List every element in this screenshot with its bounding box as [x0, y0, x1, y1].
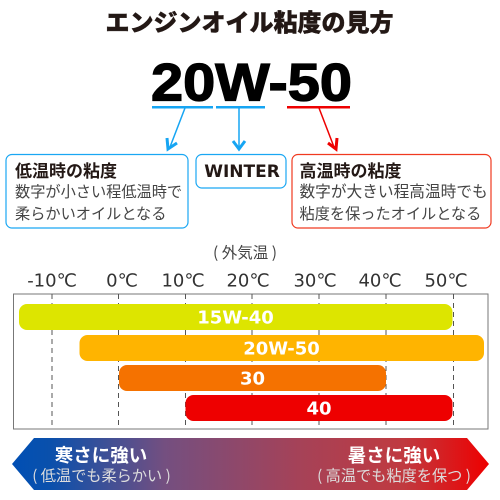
bar: 15W-40: [19, 304, 452, 330]
arrow: 20 to low temperature: [167, 108, 185, 149]
temperature axis labels: 0℃: [106, 270, 138, 292]
chart axis title: ( 外気温 ): [213, 241, 277, 263]
panel: low temperature viscosity: [6, 154, 188, 228]
underline: 50: [287, 106, 350, 108]
panel: high temperature viscosity: [292, 154, 491, 228]
temperature axis labels: 40℃: [358, 270, 402, 292]
heat resistance note: ( 高温でも粘度を保つ ): [317, 464, 471, 486]
panel: high temperature viscosity: 高温時の粘度: [300, 157, 402, 182]
cold resistance label: 寒さに強い: [55, 442, 147, 468]
panel: winter: WINTER: [204, 162, 280, 182]
arrow: W to winter: [233, 108, 245, 149]
bar: 40: 40: [306, 398, 332, 420]
underline: 20: [152, 106, 213, 108]
bar: 40: [186, 395, 452, 421]
temperature axis labels: 10℃: [161, 270, 205, 292]
panel: low temperature viscosity: 数字が小さい程低温時で: [15, 180, 182, 202]
panel: high temperature viscosity: 数字が大きい程高温時でも: [300, 179, 488, 202]
temperature axis labels: 20℃: [226, 270, 270, 292]
cold resistance note: ( 低温でも柔らかい ): [32, 464, 171, 486]
temperature axis labels: 30℃: [293, 270, 337, 292]
chart: temperature range by oil grade: [14, 294, 488, 429]
panel: winter: [196, 154, 286, 188]
temperature axis labels: [27, 270, 468, 292]
bar: 30: 30: [240, 368, 265, 390]
panel: low temperature viscosity: 低温時の粘度: [15, 157, 117, 182]
panel: high temperature viscosity: 粘度を保ったオイルとなる: [300, 202, 481, 224]
title: エンジンオイル粘度の見方: [106, 3, 394, 38]
bar: 15W-40: 15W-40: [197, 308, 274, 328]
bar: 30: [119, 365, 386, 391]
panel: low temperature viscosity: 柔らかいオイルとなる: [15, 202, 166, 224]
underline: W: [216, 106, 265, 108]
bar: 20W-50: 20W-50: [243, 338, 320, 360]
temperature axis labels: -10℃: [27, 270, 77, 292]
viscosity code 20W-50: 20W-50: [151, 53, 352, 112]
temperature axis labels: 50℃: [424, 270, 468, 292]
double arrow: cold to hot resistance: [12, 438, 489, 490]
bar: 20W-50: [80, 335, 484, 361]
heat resistance label: 暑さに強い: [348, 442, 440, 468]
arrow: 50 to high temperature: [319, 108, 337, 149]
